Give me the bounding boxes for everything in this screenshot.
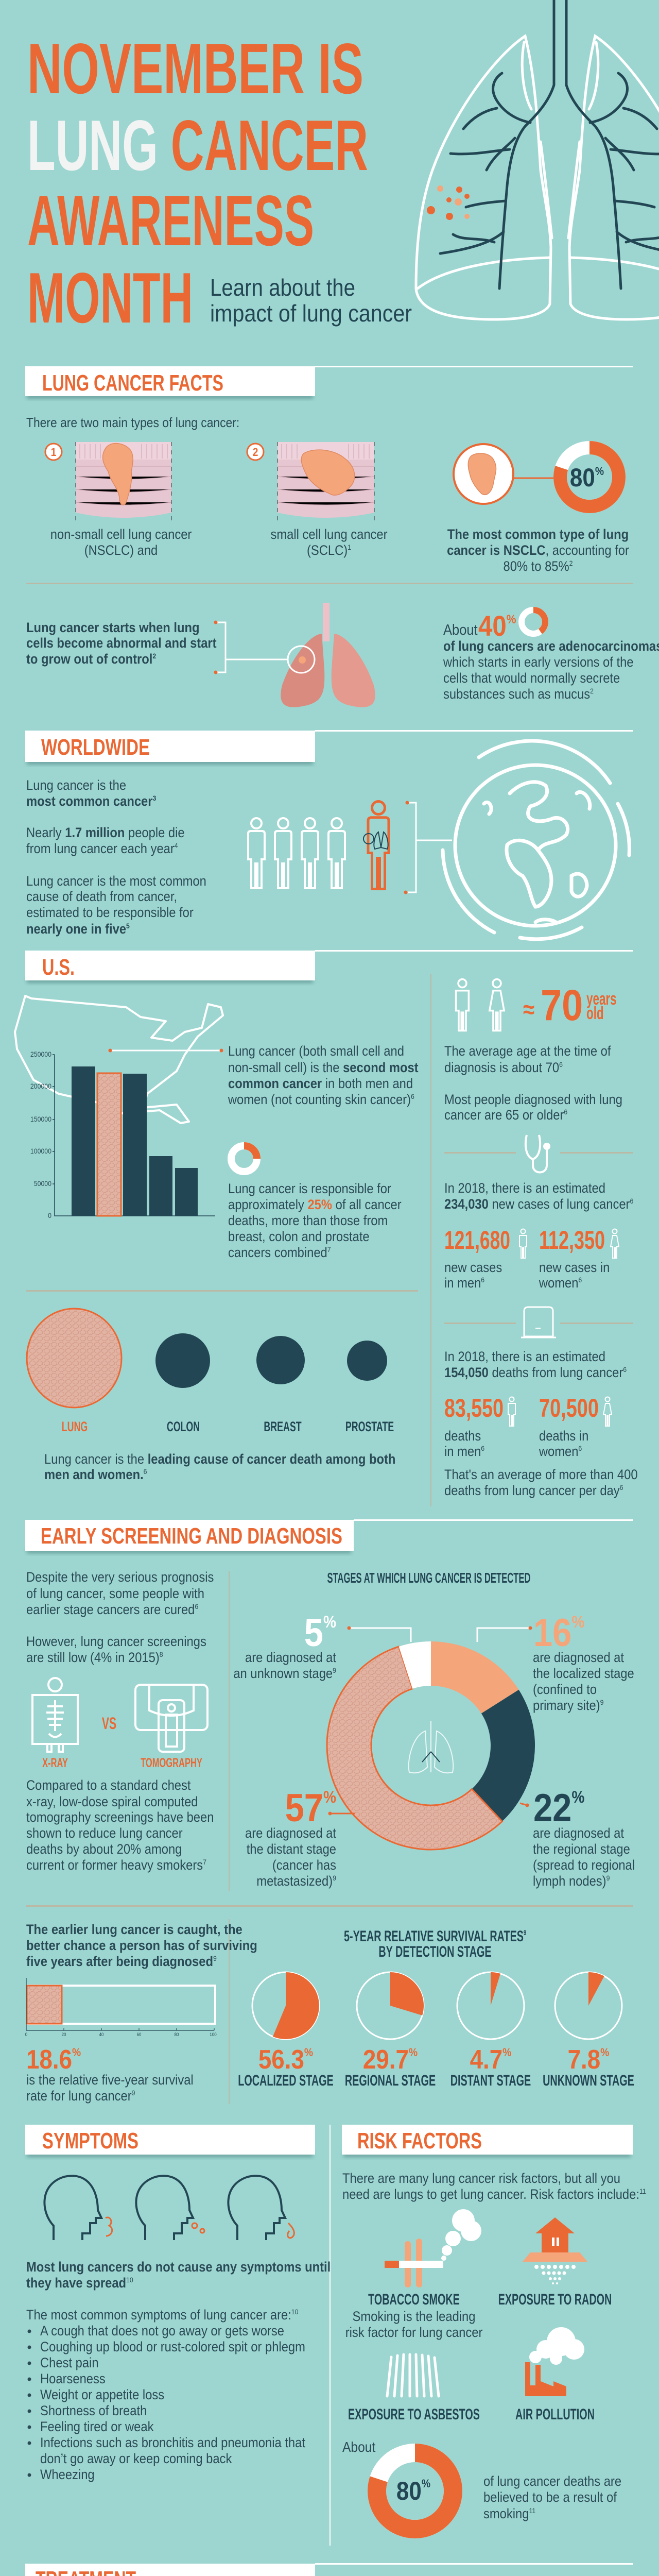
panel: NSCLC: 1 bbox=[51, 446, 56, 459]
chart: stages donut: % bbox=[323, 1613, 336, 1631]
header: U.S. bbox=[25, 950, 633, 983]
chart: survival pies: DISTANT STAGE bbox=[450, 2072, 531, 2089]
text: second most common: common cancer in both men and bbox=[228, 1076, 413, 1091]
text: symptoms list: 10 bbox=[126, 2276, 133, 2284]
icon: asbestos: EXPOSURE TO ASBESTOS bbox=[348, 2406, 480, 2423]
donut: 80% smoking bbox=[342, 2439, 621, 2529]
panel: new cases: 6 bbox=[481, 1276, 484, 1284]
text: second most common bbox=[228, 1044, 419, 1107]
chart: stages donut: (cancer has bbox=[272, 1858, 336, 1873]
icon: tobacco smoke bbox=[345, 2209, 483, 2340]
text: screening bbox=[26, 1570, 214, 1665]
header: early screening bbox=[25, 1519, 633, 1553]
text: screening: earlier stage cancers are cured bbox=[26, 1602, 195, 1617]
chart: stages donut: 9 bbox=[606, 1874, 610, 1882]
donut: 80% smoking: % bbox=[422, 2478, 430, 2490]
panel: five-year survival bar: 80 bbox=[175, 2032, 179, 2037]
chart: stages donut: 57 bbox=[285, 1786, 323, 1830]
header: lung cancer facts: LUNG CANCER FACTS bbox=[42, 370, 223, 396]
header: treatment bbox=[25, 2563, 633, 2576]
text: CT comparison: 7 bbox=[203, 1858, 206, 1866]
panel: five-year survival bar: 20 bbox=[62, 2032, 66, 2037]
text: symptoms list: Wheezing bbox=[40, 2467, 95, 2482]
panel: five-year survival bar: 18.6 bbox=[26, 2045, 72, 2075]
header: lung cancer facts bbox=[25, 366, 633, 399]
text: screening: of lung cancer, some people with bbox=[26, 1586, 204, 1601]
panel: average age: cancer are 65 or older bbox=[444, 1108, 564, 1123]
chart: stages donut: an unknown stage bbox=[233, 1666, 333, 1681]
panel: new cases: new cases bbox=[444, 1260, 502, 1275]
panel: NSCLC: non-small cell lung cancer bbox=[50, 527, 192, 542]
text: risk intro: There are many lung cancer risk factors, but all you bbox=[342, 2171, 620, 2186]
text: screening: 6 bbox=[195, 1602, 198, 1611]
text: symptoms list bbox=[26, 2260, 331, 2482]
panel: deaths: 6 bbox=[620, 1483, 623, 1492]
panel: 40% adenocarcinomas: cells that would normally secrete bbox=[443, 671, 620, 686]
chart: stages donut: 5 bbox=[304, 1611, 323, 1655]
chart: death circles: BREAST bbox=[264, 1418, 302, 1434]
chart: stages donut: are diagnosed at bbox=[533, 1826, 624, 1841]
text: CT comparison: current or former heavy smokers bbox=[26, 1858, 203, 1873]
text: symptoms list: Feeling tired or weak bbox=[40, 2419, 154, 2434]
text: worldwide facts bbox=[26, 778, 206, 937]
panel: deaths: That's an average of more than 400 bbox=[444, 1467, 638, 1482]
text: worldwide facts: 4 bbox=[175, 841, 178, 850]
text: screening: are still low (4% in 2015) bbox=[26, 1650, 160, 1665]
panel: five-year survival bar: five years after being diagnosed bbox=[26, 1954, 213, 1969]
chart: stages donut: the localized stage bbox=[533, 1666, 634, 1681]
text: worldwide facts: estimated to be responsible for bbox=[26, 905, 194, 920]
bar chart: new cases by cancer: 0 bbox=[48, 1211, 51, 1219]
text: symptoms list: Most lung cancers do not cause any symptoms until bbox=[26, 2260, 331, 2275]
text: worldwide facts: Nearly 1.7 million people die bbox=[26, 825, 185, 840]
text: worldwide facts: 5 bbox=[126, 922, 130, 930]
chart: stages donut: 9 bbox=[333, 1666, 336, 1674]
text: 25% of deaths: deaths, more than those from bbox=[228, 1213, 388, 1228]
title: LUNG CANCER bbox=[27, 106, 368, 185]
panel: NSCLC: (NSCLC) and bbox=[84, 543, 158, 558]
panel: NSCLC 80%: % bbox=[595, 465, 604, 478]
chart: survival pies: % bbox=[600, 2046, 609, 2059]
panel: average age: ≈ bbox=[523, 997, 534, 1023]
icon: US map outline bbox=[15, 996, 223, 1123]
bar chart: new cases by cancer bbox=[0, 1050, 215, 2576]
panel: SCLC: small cell lung cancer bbox=[271, 527, 388, 542]
chart: stages donut: primary site) bbox=[533, 1698, 600, 1713]
panel: average age: diagnosis is about 70 bbox=[444, 1060, 559, 1075]
icon: tobacco smoke: TOBACCO SMOKE bbox=[368, 2291, 460, 2308]
chart: death circles: men and women. bbox=[44, 1467, 144, 1482]
panel: average age: years bbox=[586, 989, 617, 1009]
icon: globe bbox=[443, 741, 629, 939]
panel: new cases: 112,350 bbox=[539, 1226, 605, 1255]
text: 25% of deaths: cancers combined bbox=[228, 1245, 327, 1260]
chart: survival pies: 29.7 bbox=[363, 2045, 409, 2075]
text: second most common: 6 bbox=[411, 1092, 414, 1100]
panel: deaths: In 2018, there is an estimated bbox=[444, 1349, 605, 1364]
chart: survival pies: LOCALIZED STAGE bbox=[238, 2072, 334, 2089]
chart: death circles bbox=[27, 1309, 395, 1482]
panel: five-year survival bar: is the relative five-year survival bbox=[26, 2073, 194, 2088]
panel: 40% adenocarcinomas: 40 bbox=[478, 610, 507, 642]
text: lung cancer starts bbox=[26, 620, 217, 667]
icon: heads coughing bbox=[44, 2176, 294, 2240]
panel: SCLC: (SCLC) bbox=[307, 543, 348, 558]
icon: tobacco smoke: risk factor for lung cancer bbox=[345, 2325, 483, 2340]
panel: average age: 6 bbox=[559, 1060, 563, 1069]
chart: death circles: Lung cancer is the leading cause of cancer death among both bbox=[44, 1452, 395, 1467]
header: U.S.: U.S. bbox=[42, 955, 75, 980]
panel: deaths: deaths bbox=[444, 1429, 481, 1444]
donut: 80% smoking: of lung cancer deaths are bbox=[483, 2474, 621, 2489]
chart: stages donut: are diagnosed at bbox=[245, 1826, 336, 1841]
panel: five-year survival bar: 0 bbox=[25, 2032, 27, 2037]
panel: SCLC bbox=[247, 442, 388, 558]
text: symptoms list: 10 bbox=[291, 2308, 298, 2316]
callout bracket bbox=[214, 620, 315, 674]
panel: five-year survival bar: 60 bbox=[137, 2032, 142, 2037]
panel: five-year survival bar: 40 bbox=[99, 2032, 104, 2037]
chart: stages donut: 9 bbox=[600, 1698, 603, 1706]
chart: stages donut: are diagnosed at bbox=[245, 1650, 336, 1665]
panel: 40% adenocarcinomas: 2 bbox=[590, 687, 594, 695]
text: worldwide facts: Lung cancer is the bbox=[26, 778, 126, 793]
chart: stages donut bbox=[233, 1570, 635, 1889]
panel: new cases: 6 bbox=[578, 1276, 582, 1284]
panel: NSCLC 80%: 80 bbox=[570, 463, 595, 492]
panel: average age: The average age at the time of bbox=[444, 1044, 611, 1059]
panel: new cases: In 2018, there is an estimated bbox=[444, 1181, 605, 1196]
title: MONTH bbox=[27, 258, 193, 338]
text: symptoms list: Coughing up blood or rust-colored spit or phlegm bbox=[40, 2340, 305, 2354]
text: risk intro bbox=[342, 2171, 646, 2202]
panel: NSCLC 80%: 2 bbox=[569, 559, 573, 567]
donut: 80% smoking: 80 bbox=[396, 2476, 422, 2505]
panel: deaths: women bbox=[539, 1444, 578, 1459]
chart: death circles: LUNG bbox=[62, 1418, 88, 1434]
text: second most common: women (not counting skin cancer) bbox=[228, 1092, 411, 1107]
panel: deaths: 6 bbox=[578, 1444, 582, 1452]
icon: stethoscope bbox=[444, 1135, 633, 1173]
panel: deaths bbox=[444, 1349, 638, 1498]
panel: deaths: 6 bbox=[623, 1365, 627, 1374]
chart: survival pies: % bbox=[304, 2046, 313, 2059]
text: worldwide facts: cause of death from cancer, bbox=[26, 889, 177, 904]
panel: 40% adenocarcinomas: which starts in early versions of the bbox=[443, 655, 633, 670]
chart: survival pies: % bbox=[502, 2046, 511, 2059]
icon: air pollution bbox=[515, 2327, 595, 2423]
text: worldwide facts: nearly one in five bbox=[26, 922, 126, 937]
panel: five-year survival bar: % bbox=[72, 2046, 81, 2059]
chart: death circles: PROSTATE bbox=[345, 1418, 394, 1434]
chart: survival pies: BY DETECTION STAGE bbox=[378, 1943, 492, 1960]
icon: x-ray vs tomography: X-RAY bbox=[42, 1756, 68, 1770]
panel: new cases: women bbox=[539, 1276, 578, 1291]
icon: people (one in five) bbox=[248, 802, 389, 889]
text: CT comparison: deaths by about 20% among bbox=[26, 1842, 182, 1857]
panel: average age: 6 bbox=[564, 1108, 567, 1116]
text: lung cancer starts: Lung cancer starts when lung bbox=[26, 620, 200, 635]
chart: stages donut: metastasized) bbox=[256, 1874, 333, 1889]
panel: SCLC: 2 bbox=[253, 446, 258, 459]
text: risk intro: need are lungs to get lung cancer. Risk factors include: bbox=[342, 2187, 639, 2202]
panel: deaths: 154,050 deaths from lung cancer bbox=[444, 1365, 623, 1380]
text: lung cancer starts: to grow out of control bbox=[26, 652, 152, 667]
panel: deaths: 70,500 bbox=[539, 1394, 599, 1422]
icon: tobacco smoke: Smoking is the leading bbox=[353, 2309, 475, 2324]
header: symptoms bbox=[25, 2125, 315, 2157]
panel: deaths: deaths in bbox=[539, 1429, 588, 1444]
text: worldwide facts: from lung cancer each year bbox=[26, 841, 175, 856]
text: risk intro: 11 bbox=[639, 2187, 646, 2195]
text: symptoms list: Chest pain bbox=[40, 2355, 99, 2370]
icon: asbestos bbox=[348, 2354, 480, 2423]
panel: five-year survival bar: 9 bbox=[132, 2089, 135, 2097]
panel: 40% adenocarcinomas: substances such as mucus bbox=[443, 687, 590, 702]
chart: death circles: COLON bbox=[167, 1418, 200, 1434]
panel: 40% adenocarcinomas bbox=[443, 610, 659, 702]
callout bracket worldwide bbox=[404, 801, 452, 894]
chart: survival pies bbox=[238, 1928, 634, 2089]
bar chart: new cases by cancer: 50000 bbox=[34, 1179, 51, 1188]
text: screening: Despite the very serious prognosis bbox=[26, 1570, 214, 1585]
panel: average age: Most people diagnosed with lung bbox=[444, 1092, 622, 1107]
bar chart: new cases by cancer: 100000 bbox=[30, 1147, 51, 1155]
chart: stages donut: are diagnosed at bbox=[533, 1650, 624, 1665]
panel: new cases bbox=[444, 1181, 633, 1291]
title: NOVEMBER IS bbox=[27, 29, 363, 109]
chart: survival pies: 5-YEAR RELATIVE SURVIVAL RATES bbox=[344, 1928, 524, 1945]
icon: radon: EXPOSURE TO RADON bbox=[498, 2291, 612, 2308]
text: screening: 8 bbox=[160, 1650, 163, 1658]
panel: new cases: 121,680 bbox=[444, 1226, 510, 1255]
chart: stages donut: % bbox=[571, 1613, 584, 1631]
subtitle: impact of lung cancer bbox=[210, 300, 412, 327]
bar chart: new cases by cancer: 200000 bbox=[30, 1082, 51, 1090]
hero lungs illustration bbox=[416, 0, 659, 319]
chart: stages donut: 16 bbox=[533, 1611, 571, 1655]
bar chart: new cases by cancer: 150000 bbox=[30, 1115, 51, 1123]
text: 25% of deaths: Lung cancer is responsible for bbox=[228, 1181, 391, 1196]
chart: stages donut: (confined to bbox=[533, 1682, 597, 1697]
panel: new cases: 234,030 new cases of lung cancer bbox=[444, 1197, 630, 1212]
panel: five-year survival bar: The earlier lung cancer is caught, the bbox=[26, 1922, 242, 1937]
icon: x-ray vs tomography: VS bbox=[102, 1714, 116, 1733]
subtitle bbox=[210, 274, 412, 327]
chart: stages donut: % bbox=[571, 1788, 584, 1806]
text: symptoms list: The most common symptoms of lung cancer are: bbox=[26, 2308, 291, 2323]
text: CT comparison: Compared to a standard chest bbox=[26, 1778, 191, 1793]
chart: survival pies: UNKNOWN STAGE bbox=[543, 2072, 634, 2089]
panel: deaths: 6 bbox=[481, 1444, 484, 1452]
chart: survival pies: % bbox=[409, 2046, 418, 2059]
text: symptoms list: Hoarseness bbox=[40, 2371, 106, 2386]
text: CT comparison: x-ray, low-dose spiral computed bbox=[26, 1794, 198, 1809]
chart: stages donut: lymph nodes) bbox=[533, 1874, 606, 1889]
panel: NSCLC bbox=[45, 442, 192, 558]
title bbox=[27, 29, 368, 338]
icon: tombstone bbox=[444, 1307, 633, 1337]
text: symptoms list: they have spread bbox=[26, 2276, 126, 2291]
panel: NSCLC 80% bbox=[447, 444, 629, 574]
donut: 80% smoking: smoking bbox=[483, 2506, 529, 2521]
header: early screening: EARLY SCREENING AND DIAGNOSIS bbox=[41, 1523, 342, 1549]
panel: deaths: deaths from lung cancer per day bbox=[444, 1483, 620, 1498]
text: symptoms list: Weight or appetite loss bbox=[40, 2387, 164, 2402]
header: risk factors: RISK FACTORS bbox=[357, 2128, 482, 2154]
panel: five-year survival bar: better chance a person has of surviving bbox=[26, 1938, 257, 1953]
chart: stages donut: (spread to regional bbox=[533, 1858, 635, 1873]
bar chart: new cases by cancer: 250000 bbox=[30, 1050, 51, 1058]
donut: 80% smoking: believed to be a result of bbox=[483, 2490, 617, 2505]
panel: five-year survival bar bbox=[25, 1922, 257, 2104]
header: symptoms: SYMPTOMS bbox=[42, 2128, 138, 2154]
panel: NSCLC 80%: The most common type of lung bbox=[447, 527, 629, 542]
icon: radon bbox=[498, 2217, 612, 2308]
subtitle: Learn about the bbox=[210, 274, 355, 301]
header: worldwide bbox=[25, 730, 633, 765]
text: lung cancer starts: 2 bbox=[152, 652, 156, 660]
chart: stages donut: 9 bbox=[333, 1874, 336, 1882]
icon: x-ray vs tomography: TOMOGRAPHY bbox=[141, 1756, 202, 1770]
text: 25% of deaths: 7 bbox=[327, 1245, 331, 1253]
text: 25% of deaths: approximately 25% of all cancer bbox=[228, 1197, 402, 1212]
panel: five-year survival bar: 100 bbox=[210, 2032, 217, 2037]
chart: survival pies: 7.8 bbox=[568, 2045, 600, 2075]
icon: pink lungs bbox=[281, 603, 375, 707]
panel: average age bbox=[444, 979, 622, 1123]
chart: survival pies: 56.3 bbox=[258, 2045, 304, 2075]
chart: survival pies: 4.7 bbox=[470, 2045, 502, 2075]
chart: survival pies: 9 bbox=[524, 1928, 526, 1937]
text: symptoms list: A cough that does not go away or gets worse bbox=[40, 2324, 284, 2338]
text: symptoms list: Shortness of breath bbox=[40, 2403, 147, 2418]
text: lung cancer starts: cells become abnormal and start bbox=[26, 636, 217, 651]
title: AWARENESS bbox=[27, 181, 314, 261]
chart: survival pies: REGIONAL STAGE bbox=[345, 2072, 436, 2089]
intro: two main types: There are two main types of lung cancer: bbox=[26, 416, 239, 430]
panel: average age: old bbox=[586, 1004, 604, 1023]
text: worldwide facts: Lung cancer is the most common bbox=[26, 874, 206, 889]
text: 25% of deaths: breast, colon and prostate bbox=[228, 1229, 370, 1244]
text: symptoms list: don’t go away or keep coming back bbox=[40, 2451, 232, 2466]
panel: deaths: 83,550 bbox=[444, 1394, 504, 1422]
header: risk factors bbox=[342, 2125, 633, 2157]
donut 25% bbox=[231, 1146, 257, 1172]
header: worldwide: WORLDWIDE bbox=[41, 735, 150, 760]
text: symptoms list: Infections such as bronchitis and pneumonia that bbox=[40, 2435, 305, 2450]
icon: x-ray vs tomography bbox=[32, 1678, 207, 1770]
text: CT comparison: shown to reduce lung cancer bbox=[26, 1826, 183, 1841]
text: CT comparison bbox=[26, 1778, 214, 1873]
panel: 40% adenocarcinomas: % bbox=[507, 613, 516, 626]
chart: stages donut: the regional stage bbox=[533, 1842, 630, 1857]
panel: 40% adenocarcinomas: About bbox=[443, 621, 478, 638]
panel: SCLC: 1 bbox=[348, 543, 351, 551]
panel: NSCLC 80%: 80% to 85% bbox=[504, 559, 569, 574]
chart: death circles: 6 bbox=[144, 1467, 147, 1476]
panel: new cases: 6 bbox=[630, 1197, 633, 1205]
text: 25% of deaths bbox=[228, 1181, 402, 1260]
chart: stages donut: the distant stage bbox=[247, 1842, 336, 1857]
panel: five-year survival bar: 9 bbox=[213, 1954, 217, 1962]
text: screening: However, lung cancer screenings bbox=[26, 1634, 206, 1649]
panel: NSCLC 80%: cancer is NSCLC, accounting for bbox=[447, 543, 629, 558]
panel: new cases: new cases in bbox=[539, 1260, 610, 1275]
text: worldwide facts: 3 bbox=[153, 794, 156, 802]
text: worldwide facts: most common cancer bbox=[26, 794, 153, 809]
text: CT comparison: tomography screenings have been bbox=[26, 1810, 214, 1825]
panel: new cases: in men bbox=[444, 1276, 481, 1291]
chart: stages donut: % bbox=[323, 1788, 336, 1806]
connector line bbox=[108, 1049, 223, 1052]
donut: 80% smoking: About bbox=[342, 2439, 376, 2455]
icon: air pollution: AIR POLLUTION bbox=[515, 2406, 595, 2423]
panel: deaths: in men bbox=[444, 1444, 481, 1459]
panel: five-year survival bar: rate for lung cancer bbox=[26, 2089, 132, 2104]
text: second most common: non-small cell) is the second most bbox=[228, 1060, 419, 1075]
text: second most common: Lung cancer (both small cell and bbox=[228, 1044, 404, 1059]
panel: average age: 70 bbox=[541, 981, 583, 1029]
donut: 80% smoking: 11 bbox=[529, 2506, 535, 2515]
chart: stages donut: 22 bbox=[533, 1786, 571, 1830]
